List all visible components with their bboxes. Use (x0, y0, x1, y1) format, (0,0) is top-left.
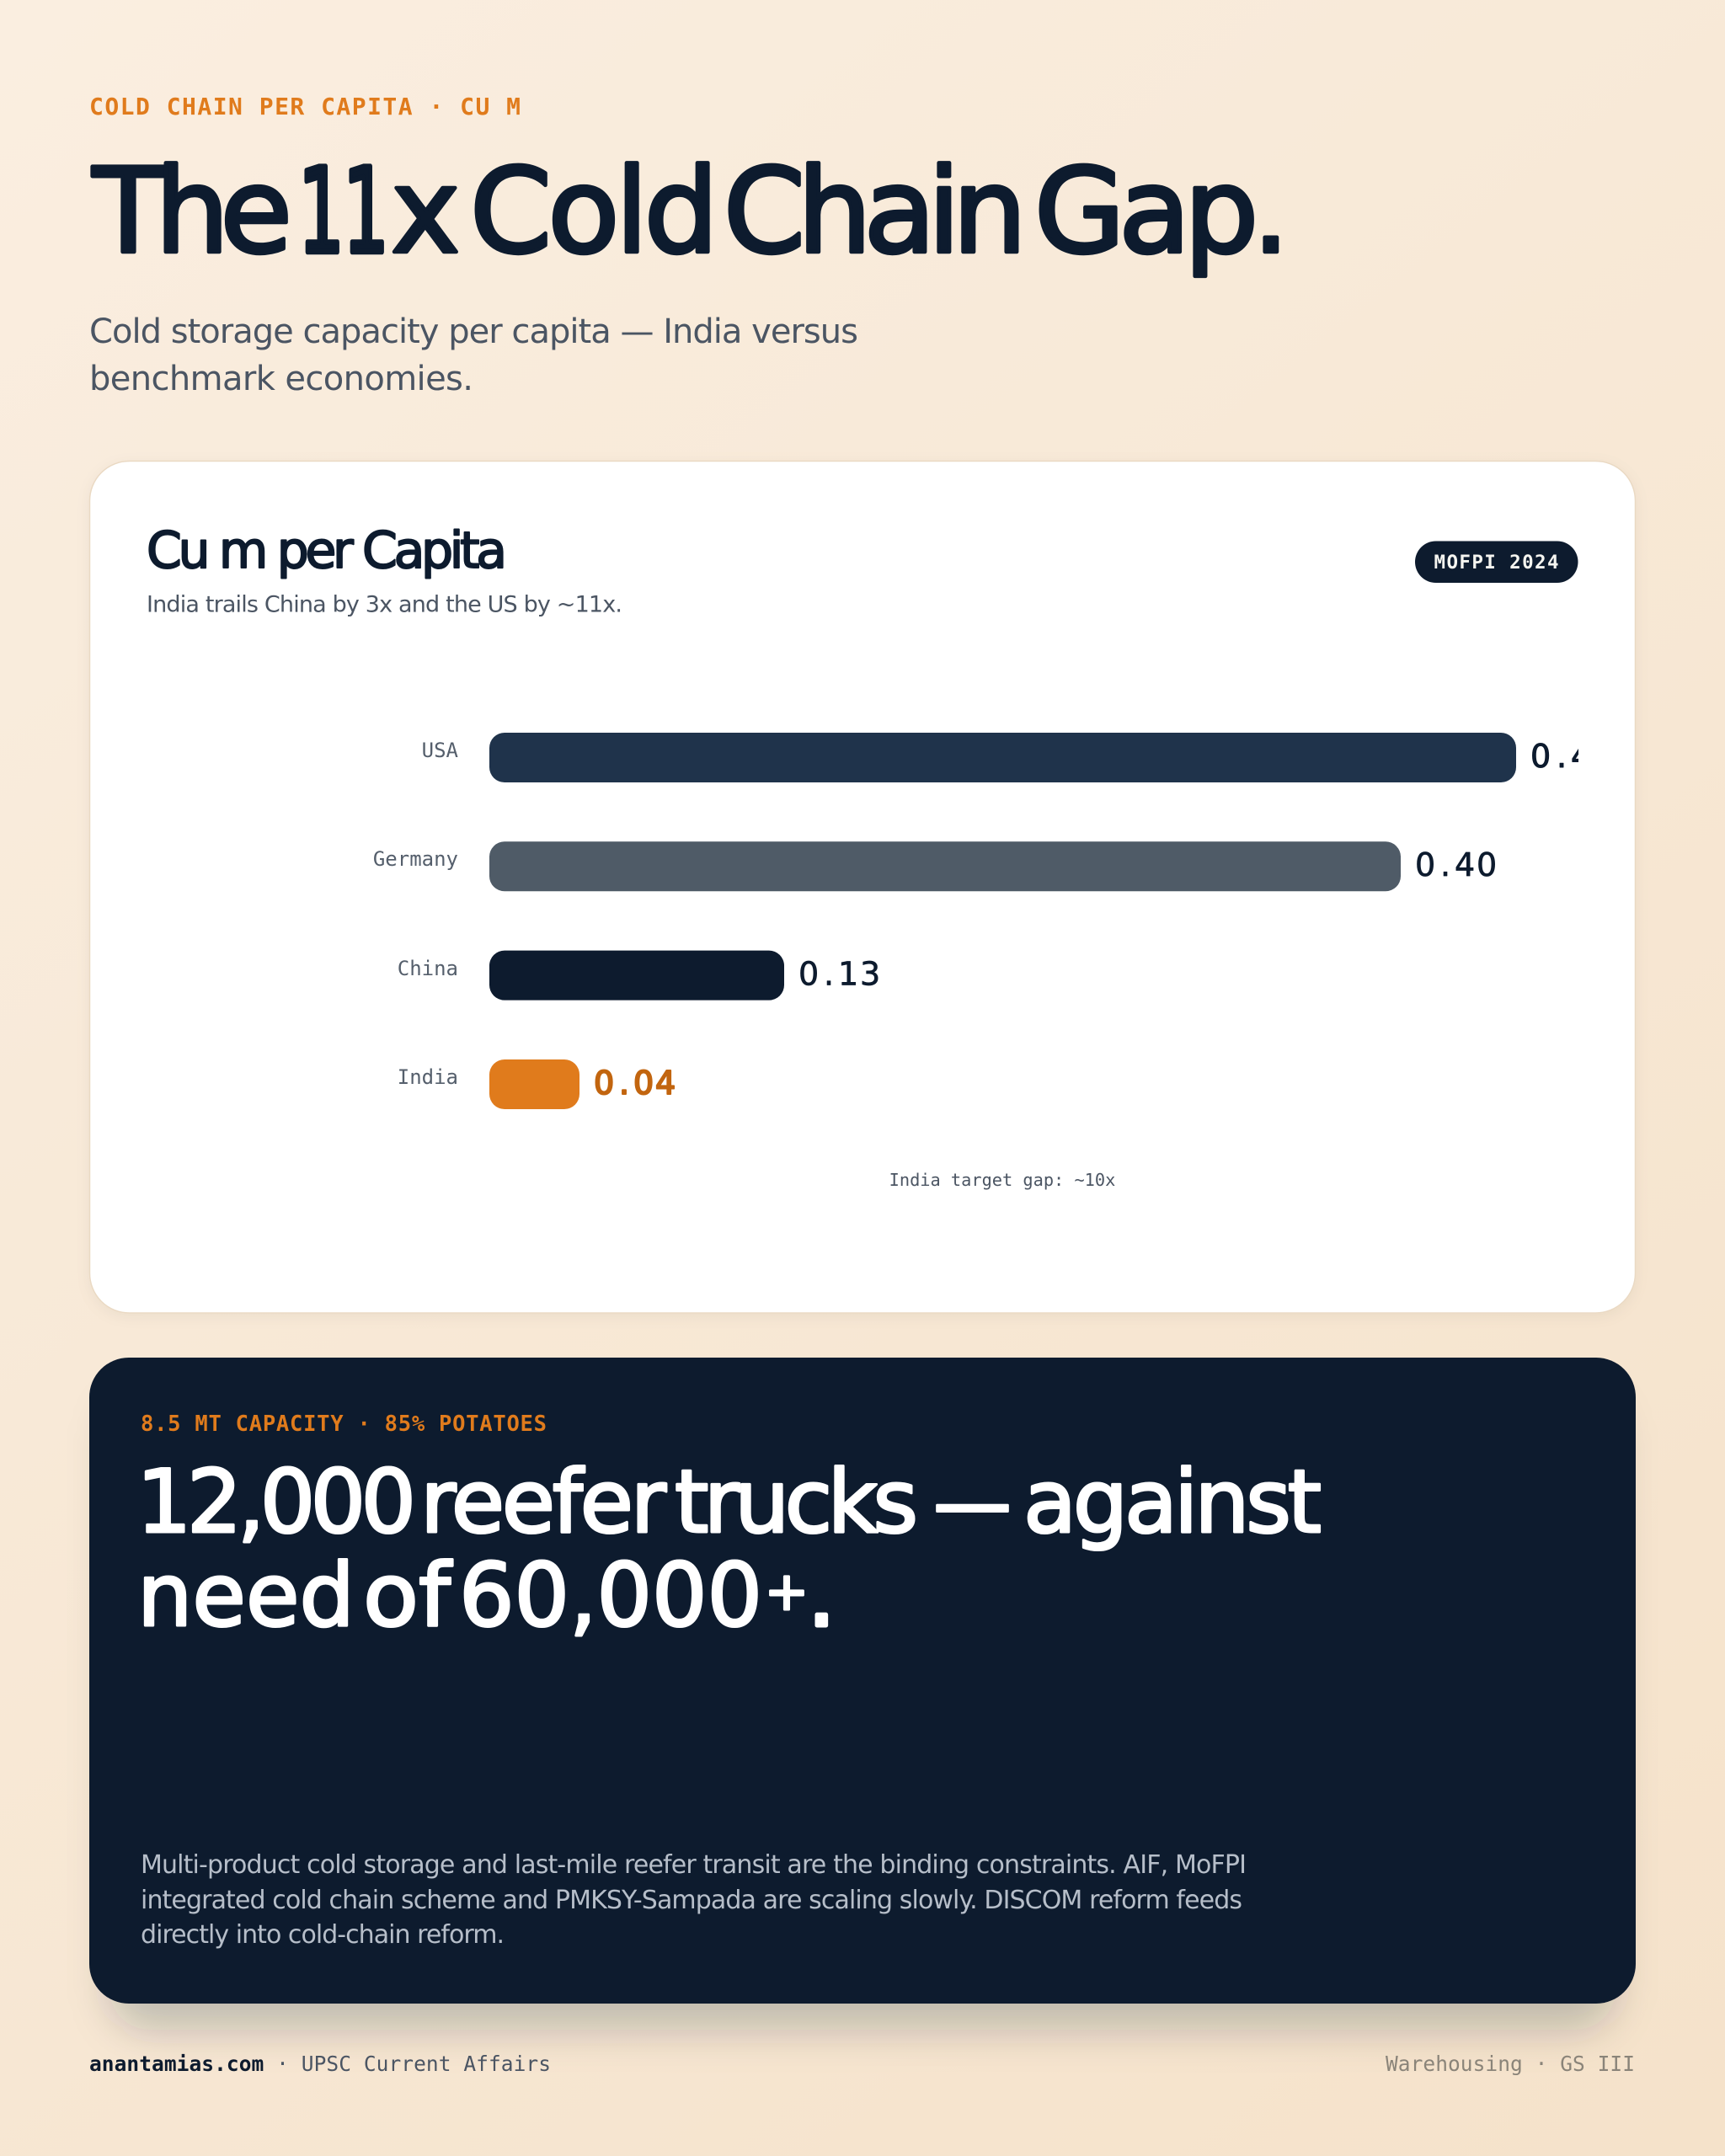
callout headline: 60,000 (459, 1545, 762, 1646)
callout headline: trucks (675, 1452, 918, 1553)
callout body: integrated cold chain scheme and PMKSY-Sampada are scaling slowly. DISCOM reform feeds (141, 1886, 1242, 1915)
footer left: anantamias.com · UPSC Current Affairs (89, 2052, 551, 2076)
callout headline: reefer (420, 1452, 667, 1553)
callout headline: of (363, 1545, 453, 1646)
bar: China (398, 951, 880, 1001)
callout body (141, 1850, 1247, 1950)
subtitle: Cold storage capacity per capita — India versus (89, 312, 858, 351)
bar: India: India (398, 1065, 458, 1089)
bar: USA (422, 733, 1613, 782)
title: Chain (724, 143, 1027, 280)
bar chart (373, 733, 1613, 1190)
shadow under callout (109, 1398, 1616, 2030)
title: Cold (470, 143, 718, 280)
title: x (391, 143, 460, 280)
callout body: Multi-product cold storage and last-mile reefer transit are the binding constraints. AIF, MoFPI (141, 1850, 1247, 1880)
callout headline: 12,000 (136, 1452, 416, 1553)
callout body: directly into cold-chain reform. (141, 1920, 505, 1950)
subtitle (89, 312, 858, 398)
panel: chart card (89, 462, 1636, 1313)
bar: India (398, 1059, 676, 1109)
chart heading: Cu m per Capita (147, 521, 507, 580)
footer right: Warehousing · GS III (1386, 2052, 1635, 2076)
bar: China: China (398, 957, 458, 980)
bar: USA: USA (422, 739, 459, 762)
bar: USA: 0.45 (1530, 738, 1613, 775)
chart note: India target gap: ~10x (889, 1170, 1115, 1190)
callout headline: . (808, 1545, 836, 1646)
bar: India: 0.04 (594, 1065, 676, 1102)
callout headline: need (137, 1545, 355, 1646)
source badge (1415, 541, 1578, 583)
eyebrow: COLD CHAIN PER CAPITA · CU M (89, 93, 521, 120)
title (92, 143, 1290, 280)
callout headline: + (765, 1561, 809, 1622)
callout headline: against (1023, 1452, 1322, 1553)
callout headline: — (933, 1452, 1012, 1553)
bar: Germany: 0.40 (1415, 846, 1497, 883)
chart subheading: India trails China by 3x and the US by ~11x. (147, 591, 622, 618)
bar: Germany (373, 841, 1497, 891)
bar: Germany: Germany (373, 847, 458, 871)
title: 11 (298, 145, 389, 280)
title: Gap. (1034, 143, 1290, 280)
panel: reefer callout (89, 1358, 1636, 2004)
bar: China: 0.13 (798, 955, 880, 992)
source badge: MOFPI 2024 (1434, 552, 1558, 574)
title: The (92, 143, 292, 280)
subtitle: benchmark economies. (89, 360, 473, 398)
callout headline (136, 1452, 1322, 1646)
callout eyebrow: 8.5 MT CAPACITY · 85% POTATOES (141, 1412, 547, 1437)
